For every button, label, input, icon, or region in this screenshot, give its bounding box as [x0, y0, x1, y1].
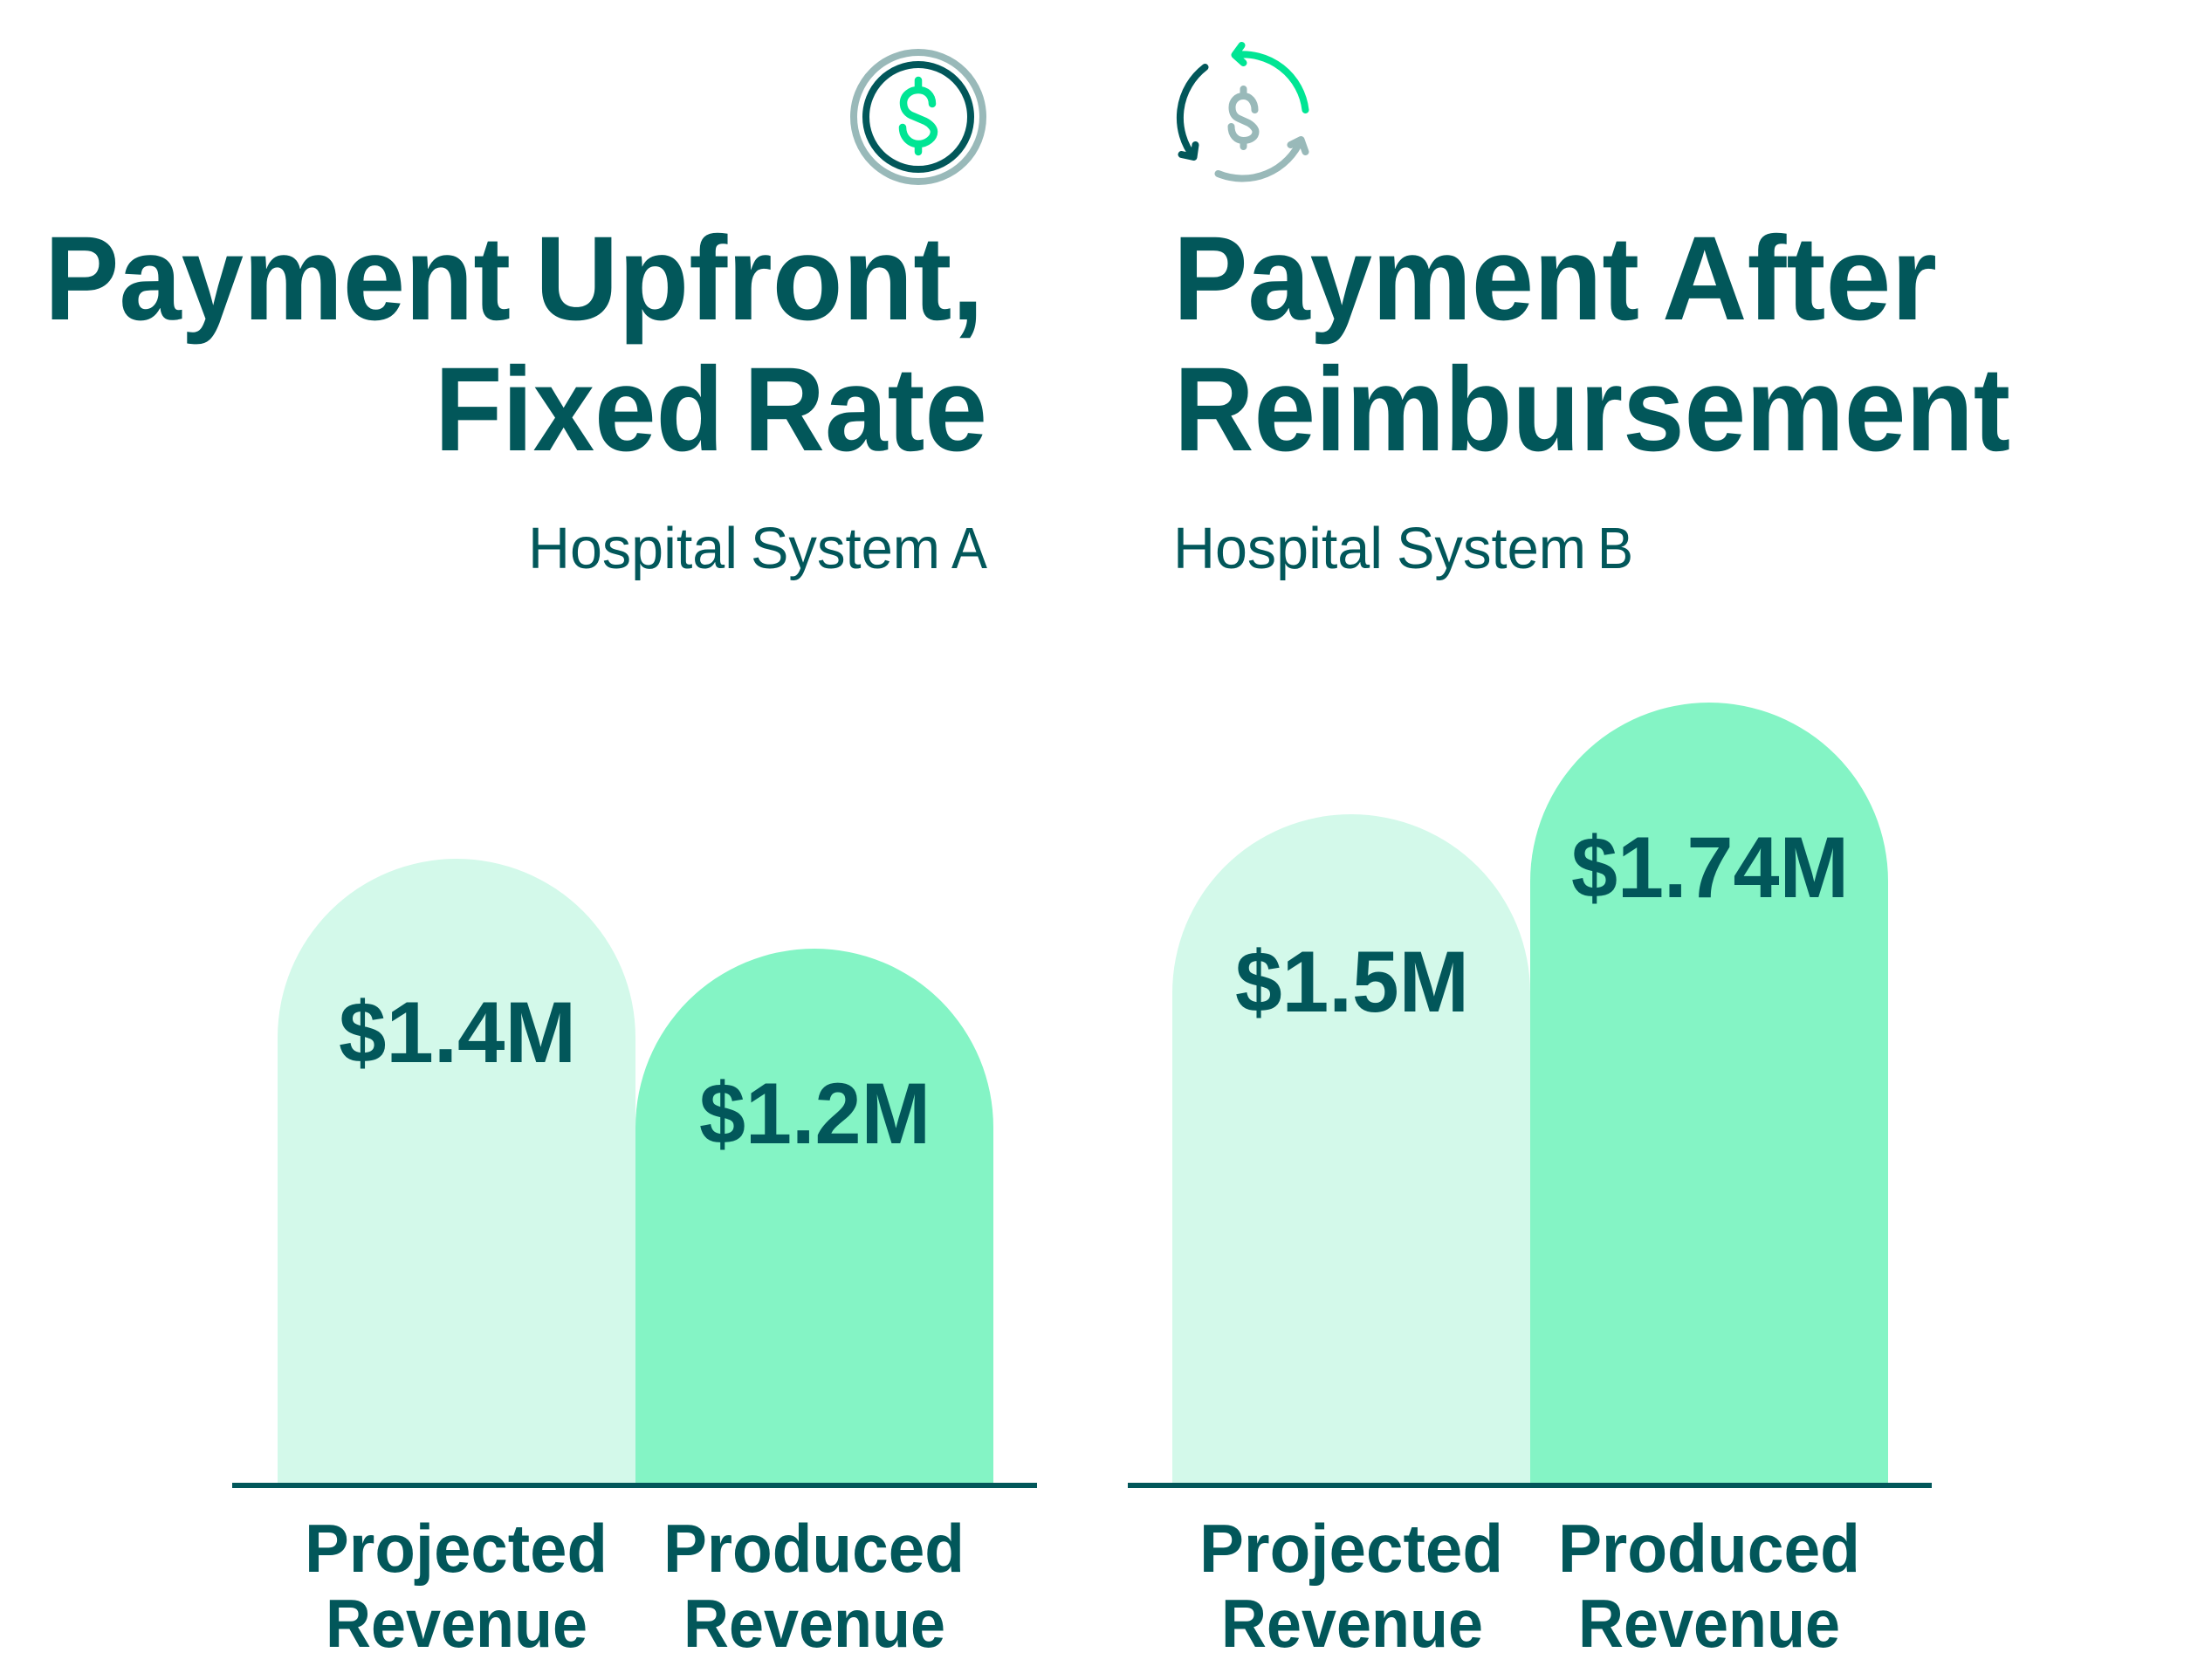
label: Projected Revenue A: Revenue	[326, 1585, 587, 1662]
subheading: Hospital System A: Hospital	[528, 516, 738, 581]
bar: produced revenue A	[635, 949, 993, 1483]
heading: Payment Upfront, Fixed Rate: Rate	[744, 343, 987, 477]
icon: grey dollar	[1231, 89, 1255, 147]
arrow: grey	[1219, 140, 1306, 178]
label: Produced Revenue B	[1558, 1510, 1860, 1662]
arrow: dark	[1180, 67, 1205, 157]
icon: recurring payment arrows	[1180, 45, 1306, 178]
heading: Payment Upfront, Fixed Rate: Fixed	[435, 343, 724, 477]
label: Produced Revenue A: Revenue	[683, 1585, 945, 1662]
panel: Hospital System B	[1128, 45, 2010, 1662]
subheading: Hospital System A: System	[751, 516, 940, 581]
subheading: Hospital System B: B	[1597, 516, 1633, 581]
label: Produced Revenue A	[663, 1510, 965, 1662]
value: $1.5M: $1.5M	[1235, 933, 1469, 1030]
label: Projected Revenue B	[1199, 1510, 1503, 1662]
heading: Payment After Reimbursement: Payment	[1173, 212, 1639, 346]
value: $1.74M: $1.74M	[1571, 819, 1849, 915]
arrow: green	[1234, 45, 1306, 110]
heading: Payment After Reimbursement	[1173, 212, 2010, 477]
bar: projected revenue A	[278, 859, 635, 1483]
heading: Payment Upfront, Fixed Rate	[45, 212, 987, 477]
label: Produced Revenue A: Produced	[663, 1510, 965, 1587]
bar: projected revenue B	[1172, 814, 1530, 1483]
bar: produced revenue B	[1530, 703, 1888, 1483]
label: Projected Revenue A	[305, 1510, 608, 1662]
subheading: Hospital System B: Hospital	[1173, 516, 1383, 581]
label: Projected Revenue B: Revenue	[1221, 1585, 1483, 1662]
label: Produced Revenue B: Produced	[1558, 1510, 1860, 1587]
heading: Payment After Reimbursement: Reimbursement	[1174, 343, 2010, 477]
label: Projected Revenue A: Projected	[305, 1510, 608, 1587]
subheading: Hospital System B: System	[1397, 516, 1586, 581]
label: Projected Revenue B: Projected	[1199, 1510, 1503, 1587]
icon: dollar coin	[854, 52, 983, 182]
label: Produced Revenue B: Revenue	[1578, 1585, 1840, 1662]
value: $1.2M: $1.2M	[699, 1065, 931, 1162]
axis line A	[232, 1483, 1037, 1488]
axis line B	[1128, 1483, 1932, 1488]
panel: Hospital System A	[45, 52, 1037, 1662]
subheading: Hospital System A: A	[951, 516, 987, 581]
heading: Payment Upfront, Fixed Rate: Upfront,	[535, 212, 984, 346]
heading: Payment Upfront, Fixed Rate: Payment	[45, 212, 511, 346]
heading: Payment After Reimbursement: After	[1662, 212, 1937, 346]
value: $1.4M: $1.4M	[339, 984, 576, 1080]
